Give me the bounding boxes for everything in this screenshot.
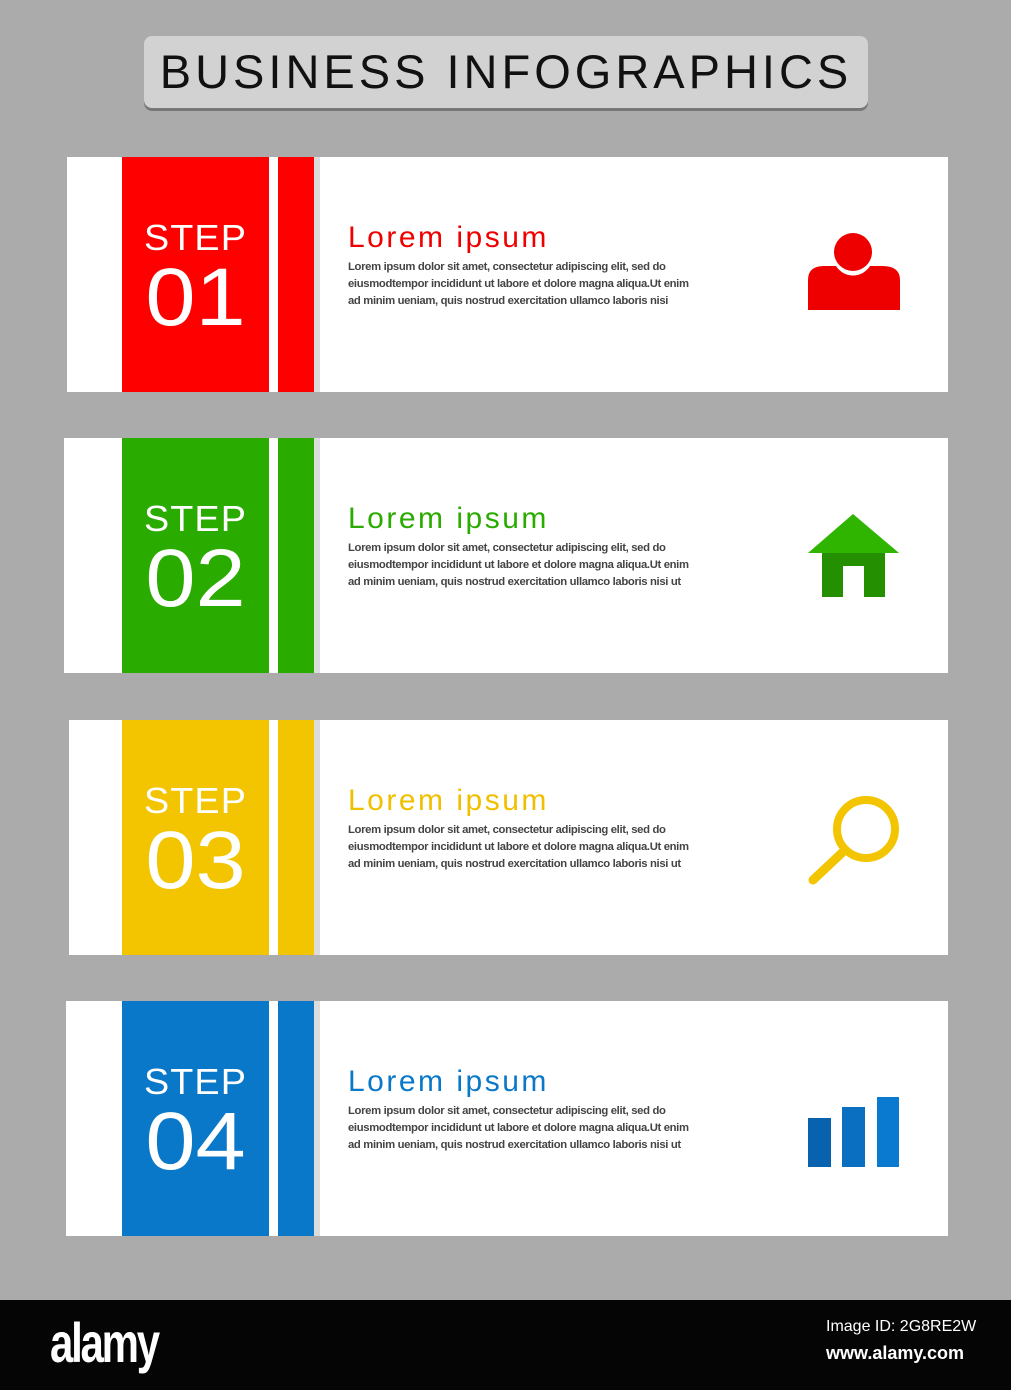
panel: step 01	[67, 157, 948, 392]
panel: step 01: STEP	[144, 217, 247, 258]
icon: house	[808, 514, 899, 597]
panel: step 02: 02	[145, 533, 246, 624]
footer bar	[0, 1300, 1011, 1390]
panel: step 03: STEP	[144, 780, 247, 821]
panel: step 01: Lorem ipsum	[348, 221, 549, 254]
panel: step 03	[69, 720, 948, 955]
logo: alamy	[50, 1311, 158, 1374]
image id: Image ID: 2G8RE2W	[826, 1318, 976, 1335]
panel: step 02: STEP	[144, 498, 247, 539]
panel: step 03: 03	[145, 815, 246, 906]
panel: step 02: Lorem ipsum dolor sit amet, consectetur adipiscing elit, sed do	[348, 542, 666, 554]
icon: bar chart	[808, 1097, 899, 1167]
panel: step 02: eiusmodtempor incididunt ut labore et dolore magna aliqua.Ut enim	[348, 559, 689, 571]
panel: step 04: STEP	[144, 1061, 247, 1102]
panel: step 02: ad minim ueniam, quis nostrud exercitation ullamco laboris nisi ut	[348, 576, 681, 588]
panel: step 04	[66, 1001, 948, 1236]
panel: step 02: Lorem ipsum	[348, 502, 549, 535]
panel: step 04: ad minim ueniam, quis nostrud exercitation ullamco laboris nisi ut	[348, 1139, 681, 1151]
panel: step 02	[64, 438, 948, 673]
panel: step 04: 04	[145, 1096, 246, 1187]
title: BUSINESS INFOGRAPHICS	[160, 45, 852, 98]
panel: step 04: eiusmodtempor incididunt ut labore et dolore magna aliqua.Ut enim	[348, 1122, 689, 1134]
icon: person	[808, 233, 900, 310]
icon: magnifier	[808, 796, 899, 884]
panel: step 01: ad minim ueniam, quis nostrud exercitation ullamco laboris nisi	[348, 295, 668, 307]
panel: step 03: Lorem ipsum dolor sit amet, consectetur adipiscing elit, sed do	[348, 824, 666, 836]
panel: step 01: 01	[145, 252, 246, 343]
panel: step 03: eiusmodtempor incididunt ut labore et dolore magna aliqua.Ut enim	[348, 841, 689, 853]
footer bar: www.alamy.com	[826, 1343, 964, 1363]
panel: step 01: eiusmodtempor incididunt ut labore et dolore magna aliqua.Ut enim	[348, 278, 689, 290]
panel: step 04: Lorem ipsum dolor sit amet, consectetur adipiscing elit, sed do	[348, 1105, 666, 1117]
panel: step 01: Lorem ipsum dolor sit amet, consectetur adipiscing elit, sed do	[348, 261, 666, 273]
panel: step 03: ad minim ueniam, quis nostrud exercitation ullamco laboris nisi ut	[348, 858, 681, 870]
panel: step 04: Lorem ipsum	[348, 1065, 549, 1098]
panel: step 03: Lorem ipsum	[348, 784, 549, 817]
